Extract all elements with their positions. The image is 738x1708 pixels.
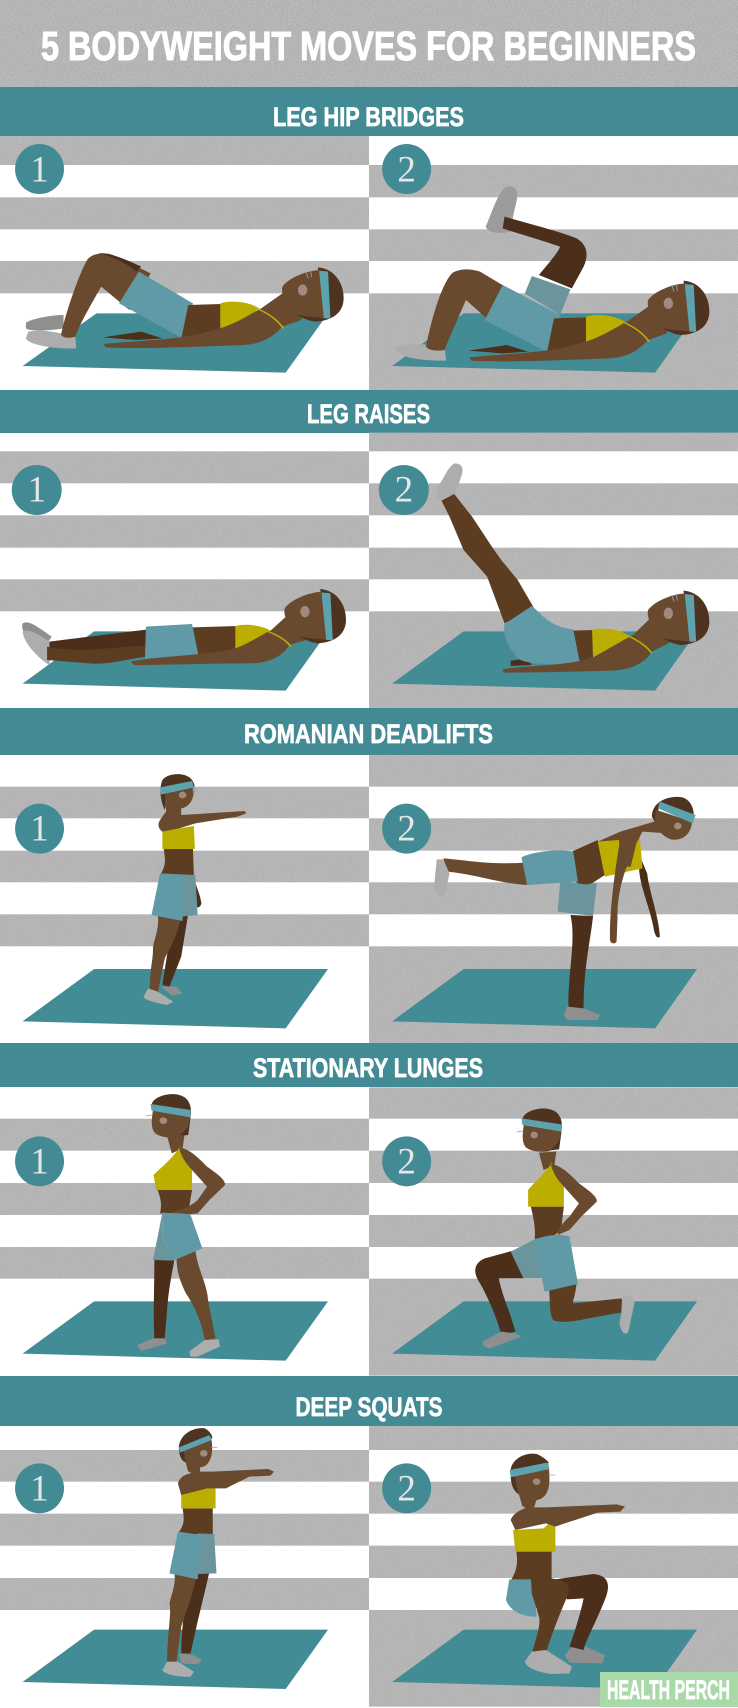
heading: leg hip bridges [0, 87, 738, 136]
title band [0, 0, 738, 87]
number badge 1: 1 [30, 809, 49, 850]
figure: leg raised [437, 463, 709, 673]
figure: bridge with raised leg [395, 186, 709, 361]
panel: leg raises step 1 [0, 451, 369, 691]
number badge 1: 1 [30, 150, 49, 191]
heading: romanian deadlifts: ROMANIAN DEADLIFTS [244, 719, 493, 749]
number badge 2: 2 [397, 1141, 416, 1182]
number badge 2 [382, 144, 431, 194]
section: leg raises [0, 390, 738, 708]
heading: deep squats [0, 1376, 738, 1426]
number badge 1 [15, 144, 64, 194]
number badge 1 [12, 465, 62, 515]
number badge 2: 2 [395, 470, 413, 511]
number badge 1 [15, 804, 64, 854]
number badge 2 [382, 804, 431, 854]
panel: stationary lunges step 1 [0, 1094, 369, 1361]
panel: deep squats step 2 [369, 1426, 738, 1707]
number badge 2: 2 [397, 150, 416, 191]
panel: romanian deadlifts step 2 [369, 755, 738, 1043]
panel: stationary lunges step 2 [369, 1087, 738, 1376]
panel: leg hip bridges step 2 [369, 144, 738, 390]
figure: single leg deadlift [434, 797, 696, 1020]
number badge 2 [379, 465, 429, 515]
number badge 2: 2 [397, 809, 416, 850]
panel: deep squats step 1 [0, 1428, 369, 1689]
figure: bridge start [26, 253, 344, 348]
number badge 1: 1 [27, 470, 46, 511]
number badge 2: 2 [397, 1468, 416, 1509]
heading: leg hip bridges: LEG HIP BRIDGES [273, 102, 464, 132]
panel: leg hip bridges step 1 [0, 136, 369, 373]
heading: leg raises: LEG RAISES [307, 399, 430, 429]
figure: kneeling lunge [475, 1108, 635, 1348]
panel: leg raises step 2 [369, 433, 738, 708]
number badge 2 [382, 1136, 431, 1186]
figure: standing arm forward [144, 774, 246, 1005]
heading: stationary lunges [0, 1043, 738, 1087]
section: leg hip bridges [0, 87, 738, 390]
heading: romanian deadlifts [0, 708, 738, 755]
figure: lying flat [22, 589, 346, 665]
number badge 1 [15, 1136, 64, 1186]
figure: deep squat [506, 1454, 625, 1674]
heading: stationary lunges: STATIONARY LUNGES [253, 1053, 483, 1083]
heading: deep squats: DEEP SQUATS [296, 1392, 442, 1422]
number badge 1 [15, 1463, 64, 1513]
section: romanian deadlifts [0, 708, 738, 1043]
figure: standing hands on hips [137, 1094, 225, 1357]
panel: romanian deadlifts step 1 [0, 774, 369, 1028]
number badge 2 [382, 1463, 431, 1513]
figure: standing arms forward [162, 1428, 274, 1677]
section: stationary lunges [0, 1043, 738, 1376]
number badge 1: 1 [30, 1468, 49, 1509]
number badge 1: 1 [30, 1141, 49, 1182]
section: deep squats [0, 1376, 738, 1707]
heading: leg raises [0, 390, 738, 433]
